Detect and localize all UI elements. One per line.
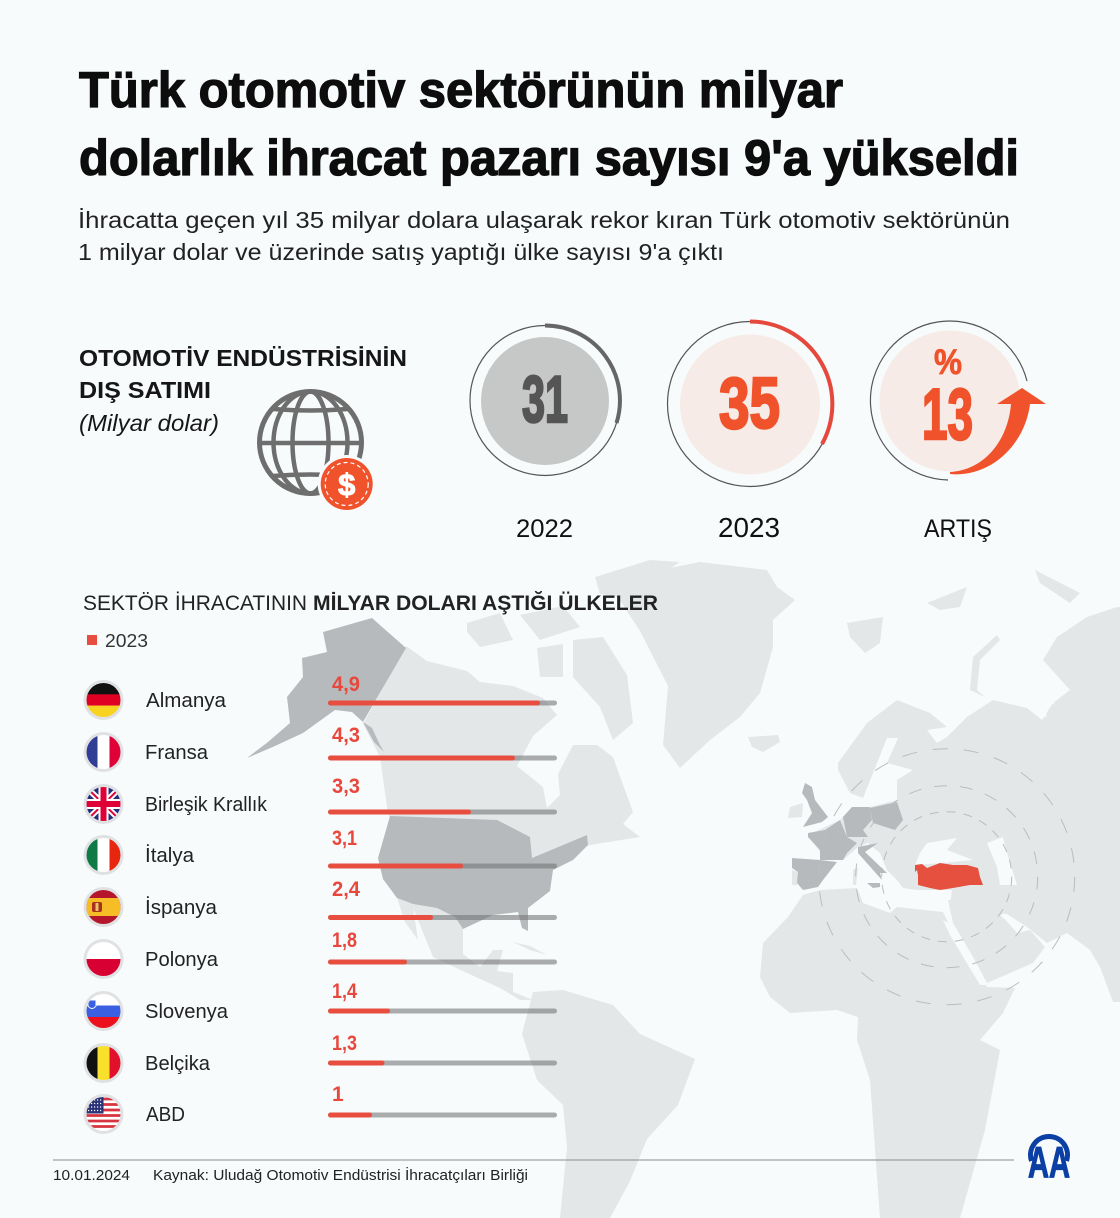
- concentric dashed rings: [819, 749, 1075, 1005]
- row: Birleşik Krallık: 3,3: [332, 775, 360, 798]
- row: Polonya: [84, 929, 557, 979]
- icon: globe with dollar coin: $: [338, 467, 355, 502]
- heading: automotive exports: [79, 345, 407, 436]
- stat: increase: [870, 321, 1046, 543]
- icon: AA logo: [1028, 1136, 1070, 1187]
- row: Birleşik Krallık: Birleşik Krallık: [145, 793, 268, 816]
- row: Polonya: Polonya: [145, 948, 219, 971]
- map: Turkey: [915, 863, 983, 890]
- title: dolarlık ihracat pazarı sayısı 9'a yükseldi: [79, 130, 1019, 186]
- icon: globe with dollar coin: [260, 392, 376, 513]
- row: Almanya: 4,9: [332, 673, 360, 696]
- stat: 2022: [470, 326, 620, 543]
- row: ABD: 1: [332, 1083, 344, 1106]
- row: İspanya: [84, 878, 557, 927]
- stat: increase: ARTIŞ: [924, 515, 992, 543]
- row: Polonya: 1,8: [332, 929, 357, 952]
- heading: automotive exports: OTOMOTİV ENDÜSTRİSİNİN: [79, 345, 407, 371]
- title: Türk otomotiv sektörünün milyar: [79, 62, 843, 118]
- row: ABD: ABD: [146, 1103, 185, 1126]
- arrow: upward increase: [950, 388, 1046, 474]
- row: İspanya: İspanya: [145, 896, 218, 919]
- subtitle: 1 milyar dolar ve üzerinde satış yaptığı ülke sayısı 9'a çıktı: [78, 239, 724, 265]
- section heading: [83, 591, 658, 615]
- icon: AA logo: AA: [1028, 1138, 1070, 1187]
- stat: 2022: 31: [522, 362, 568, 436]
- section heading: SEKTÖR İHRACATININ: [83, 592, 307, 615]
- footer: [53, 1160, 1014, 1184]
- subtitle: [78, 207, 1010, 265]
- row: İtalya: 3,1: [332, 827, 357, 850]
- row: İtalya: İtalya: [145, 844, 195, 867]
- subtitle: İhracatta geçen yıl 35 milyar dolara ulaşarak rekor kıran Türk otomotiv sektörünün: [78, 207, 1010, 233]
- legend: 2023: [105, 630, 148, 651]
- row: Belçika: 1,3: [332, 1032, 357, 1055]
- row: Almanya: Almanya: [146, 689, 227, 712]
- highlighted countries: [247, 618, 903, 931]
- row: Slovenya: 1,4: [332, 980, 357, 1003]
- stat: increase: 13: [922, 375, 973, 455]
- stat: 2023: 35: [719, 364, 780, 444]
- row: Fransa: [84, 724, 557, 772]
- Africa: [760, 888, 1015, 1218]
- row: ABD: [84, 1083, 557, 1134]
- title: [79, 62, 1019, 186]
- row: Belçika: Belçika: [145, 1052, 211, 1075]
- stat: 2023: [668, 322, 832, 543]
- row: Slovenya: Slovenya: [145, 1000, 229, 1023]
- row: Almanya: [84, 673, 557, 720]
- footer: Kaynak: Uludağ Otomotiv Endüstrisi İhracatçıları Birliği: [153, 1166, 528, 1184]
- Eurasia: [808, 607, 1120, 1002]
- row: Fransa: Fransa: [145, 741, 209, 764]
- heading: automotive exports: DIŞ SATIMI: [79, 377, 211, 403]
- stat: increase: %: [934, 343, 962, 382]
- stat: 2022: 2022: [516, 515, 573, 543]
- inland seas: [863, 662, 1055, 985]
- footer: 10.01.2024: [53, 1168, 130, 1184]
- section heading: MİLYAR DOLARI AŞTIĞI ÜLKELER: [313, 591, 658, 615]
- legend: [87, 630, 148, 651]
- row: İtalya: [84, 827, 557, 875]
- row: Fransa: 4,3: [332, 724, 360, 747]
- world map background: [247, 560, 1120, 1218]
- row: Slovenya: [84, 980, 557, 1031]
- heading: automotive exports: (Milyar dolar): [79, 410, 219, 436]
- row: İspanya: 2,4: [332, 878, 360, 901]
- row: Belçika: [84, 1032, 557, 1083]
- row: Birleşik Krallık: [84, 775, 557, 824]
- stat: 2023: 2023: [718, 512, 780, 543]
- Arabia: [948, 900, 1045, 983]
